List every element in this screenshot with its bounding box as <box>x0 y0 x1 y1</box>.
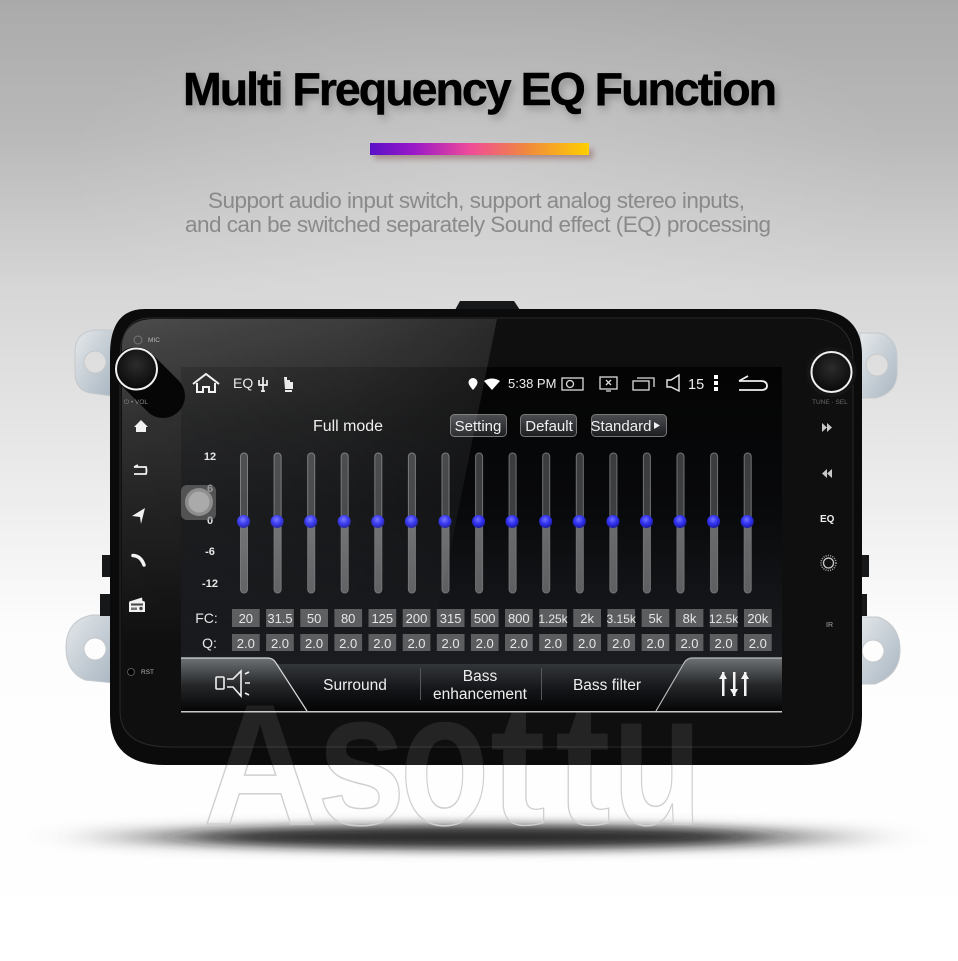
frequency row: 1.25k <box>538 612 569 626</box>
Q row: 2.0 <box>305 636 323 651</box>
status bar <box>193 374 767 393</box>
glass reflection <box>122 319 497 588</box>
toolbar labels <box>323 668 641 703</box>
frequency row: 315 <box>440 611 461 626</box>
frequency row: 500 <box>474 611 496 626</box>
watermark on device: s <box>317 653 406 865</box>
subtitle: Support audio input switch, support analog stereo inputs, <box>208 188 745 213</box>
frequency row: 125 <box>371 611 393 626</box>
icon: screenshot <box>562 378 583 390</box>
Q row: 2.0 <box>680 636 699 651</box>
device labels: ⏻ • VOL <box>124 399 148 406</box>
Q row: 2.0 <box>407 636 426 651</box>
frequency row: 200 <box>406 611 427 626</box>
bottom toolbar <box>181 658 782 712</box>
Q row <box>202 634 772 651</box>
Q row: 2.0 <box>510 636 528 651</box>
mode heading: Full mode <box>313 418 383 435</box>
frequency row: 31.5 <box>267 611 293 626</box>
buttons <box>450 414 666 436</box>
toolbar dividers <box>420 668 542 700</box>
watermark below device: s <box>317 653 406 865</box>
icon: windows <box>633 378 654 390</box>
right knob <box>806 347 856 397</box>
Q row: 2.0 <box>749 636 767 651</box>
watermark on device: u <box>612 653 703 865</box>
icon: navigate <box>132 508 145 524</box>
frequency row: 2k <box>580 611 594 626</box>
icon: usb <box>259 377 267 392</box>
icon: home <box>134 420 148 432</box>
dB scale: -12 <box>202 578 218 590</box>
left knob <box>116 348 163 396</box>
frequency row: 3.15k <box>607 612 637 626</box>
icon: brightness <box>821 556 836 570</box>
Q row: Q: <box>202 635 217 651</box>
left tab with speaker icon <box>181 658 307 711</box>
label: EQ: EQ <box>820 514 835 525</box>
watermark on device: t <box>490 669 546 860</box>
frequency row: 20 <box>239 611 253 626</box>
Q row: 2.0 <box>271 636 289 651</box>
Q row: 2.0 <box>612 636 630 651</box>
device body <box>110 309 862 765</box>
icon: back arrow <box>739 376 767 390</box>
watermark on device: A <box>203 669 317 861</box>
volume value: 15 <box>688 377 704 393</box>
device labels: TUNE · SEL <box>812 399 848 406</box>
watermark below device: o <box>400 653 489 864</box>
icon: home <box>193 374 219 392</box>
frequency row: 8k <box>683 611 697 626</box>
subtitle: and can be switched separately Sound effect (EQ) processing <box>185 212 771 237</box>
frequency row: 80 <box>341 611 355 626</box>
button: Standard: Standard <box>591 418 651 435</box>
icon: hand <box>284 377 293 392</box>
button: Standard <box>591 414 666 436</box>
watermark below device <box>206 765 694 827</box>
title: Multi Frequency EQ Function <box>183 63 777 115</box>
icon: next <box>822 423 832 432</box>
icon: menu dots <box>714 375 718 391</box>
icon: wifi <box>484 378 500 390</box>
right side icons <box>820 423 836 570</box>
subtitle <box>185 188 771 237</box>
Q row: 2.0 <box>578 636 596 651</box>
device labels <box>124 336 848 676</box>
toolbar labels: Bass <box>463 668 497 685</box>
frequency row: 5k <box>649 611 663 626</box>
frequency row: 50 <box>307 611 321 626</box>
equalizer sliders <box>237 453 754 593</box>
frequency row: FC: <box>195 610 218 626</box>
icon: previous <box>822 469 832 478</box>
Q row: 2.0 <box>237 636 255 651</box>
watermark below device: t <box>490 669 546 860</box>
Q row: 2.0 <box>544 636 562 651</box>
assistive touch ball: 6 <box>207 483 213 495</box>
assistive touch ball <box>181 483 216 520</box>
frequency row <box>195 609 772 627</box>
toolbar labels: enhancement <box>433 686 528 703</box>
device mounting tabs <box>100 301 869 616</box>
dB scale <box>202 451 218 590</box>
watermark on device <box>227 706 692 765</box>
button: Setting: Setting <box>455 418 501 435</box>
Q row: 2.0 <box>476 636 494 651</box>
watermark on device: t <box>555 669 611 860</box>
clock: 5:38 PM <box>508 376 556 391</box>
right tab with equalizer icon <box>656 658 782 711</box>
watermark below device: A <box>203 669 317 861</box>
mounting brackets <box>66 330 900 684</box>
watermark on device: o <box>400 653 489 864</box>
Q row: 2.0 <box>646 636 664 651</box>
Q row: 2.0 <box>715 636 733 651</box>
button: Setting <box>450 414 506 436</box>
toolbar labels: Surround <box>323 677 387 694</box>
watermark below device: t <box>555 669 611 860</box>
device labels: MIC <box>148 337 160 344</box>
frequency row: 20k <box>747 611 769 626</box>
gradient accent bar <box>370 143 593 159</box>
icon: location <box>468 378 478 390</box>
dB scale: 0 <box>207 515 213 527</box>
icon: radio <box>129 598 145 612</box>
icon: speaker <box>667 375 679 391</box>
left side icons <box>129 420 148 612</box>
dB scale: 12 <box>204 451 216 463</box>
Q row: 2.0 <box>373 636 391 651</box>
dB scale: -6 <box>205 546 215 558</box>
toolbar labels: Bass filter <box>573 677 641 694</box>
device labels: RST <box>141 669 154 676</box>
watermark below device: u <box>612 653 703 865</box>
device labels: IR <box>826 622 833 629</box>
screen <box>181 367 782 712</box>
button: Default <box>520 414 576 436</box>
frequency row: 800 <box>508 611 530 626</box>
Q row: 2.0 <box>339 636 357 651</box>
ground shadow <box>88 826 868 848</box>
icon: back <box>134 465 146 474</box>
label: EQ: EQ <box>233 375 253 391</box>
icon: phone <box>133 556 144 565</box>
button: Default: Default <box>525 418 574 435</box>
icon: close screen <box>600 377 617 391</box>
frequency row: 12.5k <box>709 612 739 626</box>
Q row: 2.0 <box>442 636 460 651</box>
